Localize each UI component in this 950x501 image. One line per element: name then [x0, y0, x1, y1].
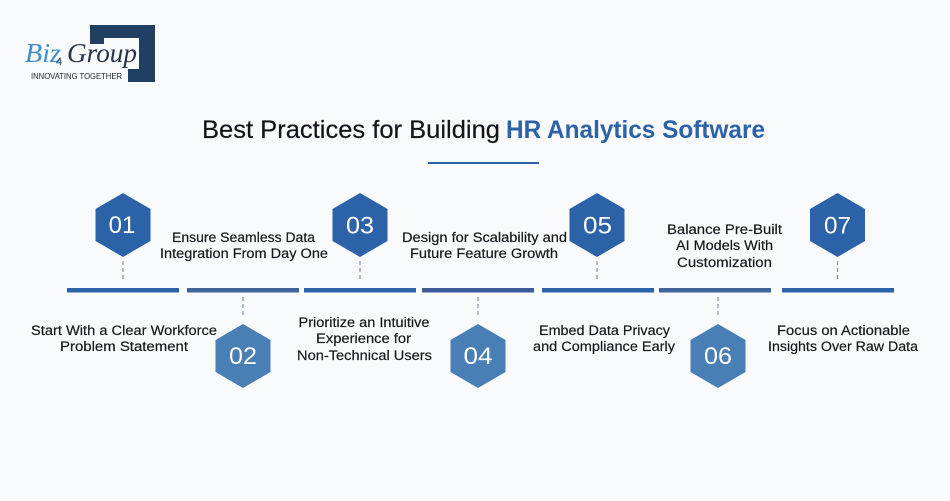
text 02: Ensure Seamless Data — [172, 230, 315, 245]
connector 06 — [717, 297, 719, 318]
hexagon 04: 04 — [464, 343, 492, 370]
hexagon 01: 01 — [109, 212, 135, 239]
step 04 — [402, 230, 567, 388]
logo: BizGroup: 4 — [56, 56, 62, 68]
bar 04 — [422, 288, 534, 292]
text 05 — [533, 323, 675, 354]
bar 05 — [542, 288, 654, 292]
bar 06 — [659, 288, 771, 292]
step 02 — [160, 230, 328, 388]
connector 05 — [596, 261, 598, 282]
logo: BizGroup: Biz — [25, 38, 61, 68]
logo: BizGroup — [25, 25, 155, 82]
text 06: AI Models With — [676, 238, 773, 253]
text 03: Experience for — [316, 331, 412, 346]
connector 01 — [122, 261, 124, 282]
text 03 — [297, 315, 432, 363]
hexagon 03: 03 — [346, 212, 374, 240]
title — [202, 116, 765, 144]
text 07: Insights Over Raw Data — [768, 339, 919, 354]
text 04 — [402, 230, 567, 261]
text 04: Future Feature Growth — [410, 246, 558, 261]
hexagon 05 — [570, 193, 624, 257]
text 01: Problem Statement — [60, 339, 188, 354]
connector 04 — [477, 297, 479, 318]
hexagon 06 — [690, 324, 746, 388]
title: HR Analytics Software — [506, 116, 765, 144]
step 06 — [659, 222, 782, 388]
hexagon 01 — [96, 193, 150, 257]
connector 03 — [359, 261, 361, 282]
hexagon 05: 05 — [583, 212, 612, 240]
text 06 — [667, 222, 782, 270]
text 02: Integration From Day One — [160, 246, 328, 261]
text 01 — [31, 323, 217, 354]
text 03: Non-Technical Users — [297, 348, 432, 363]
bar 01 — [67, 288, 179, 292]
text 04: Design for Scalability and — [402, 230, 567, 245]
hexagon 02 — [216, 324, 270, 388]
text 07 — [768, 323, 919, 354]
text 05: and Compliance Early — [533, 339, 675, 354]
text 03: Prioritize an Intuitive — [298, 315, 430, 330]
text 02 — [160, 230, 328, 261]
bar 07 — [782, 288, 894, 292]
step 07 — [768, 193, 919, 354]
bar 03 — [304, 288, 416, 292]
hexagon 07 — [810, 193, 865, 257]
hexagon 07: 07 — [824, 212, 851, 240]
title underline — [428, 162, 539, 164]
hexagon 06: 06 — [704, 343, 732, 370]
title: Best Practices for Building — [202, 116, 500, 144]
connector 02 — [242, 297, 244, 318]
step 01 — [31, 193, 217, 354]
text 06: Customization — [677, 255, 772, 270]
text 07: Focus on Actionable — [777, 323, 910, 338]
logo: BizGroup: Group — [67, 38, 137, 68]
step 03 — [297, 193, 432, 363]
hexagon 03 — [332, 193, 388, 257]
connector 07 — [836, 261, 838, 282]
text 01: Start With a Clear Workforce — [31, 323, 217, 338]
text 06: Balance Pre-Built — [667, 222, 782, 237]
hexagon 02: 02 — [229, 343, 257, 370]
bar 02 — [187, 288, 299, 292]
logo: BizGroup: INNOVATING TOGETHER — [31, 72, 122, 81]
text 05: Embed Data Privacy — [539, 323, 670, 338]
step 05 — [533, 193, 675, 354]
hexagon 04 — [450, 324, 506, 388]
